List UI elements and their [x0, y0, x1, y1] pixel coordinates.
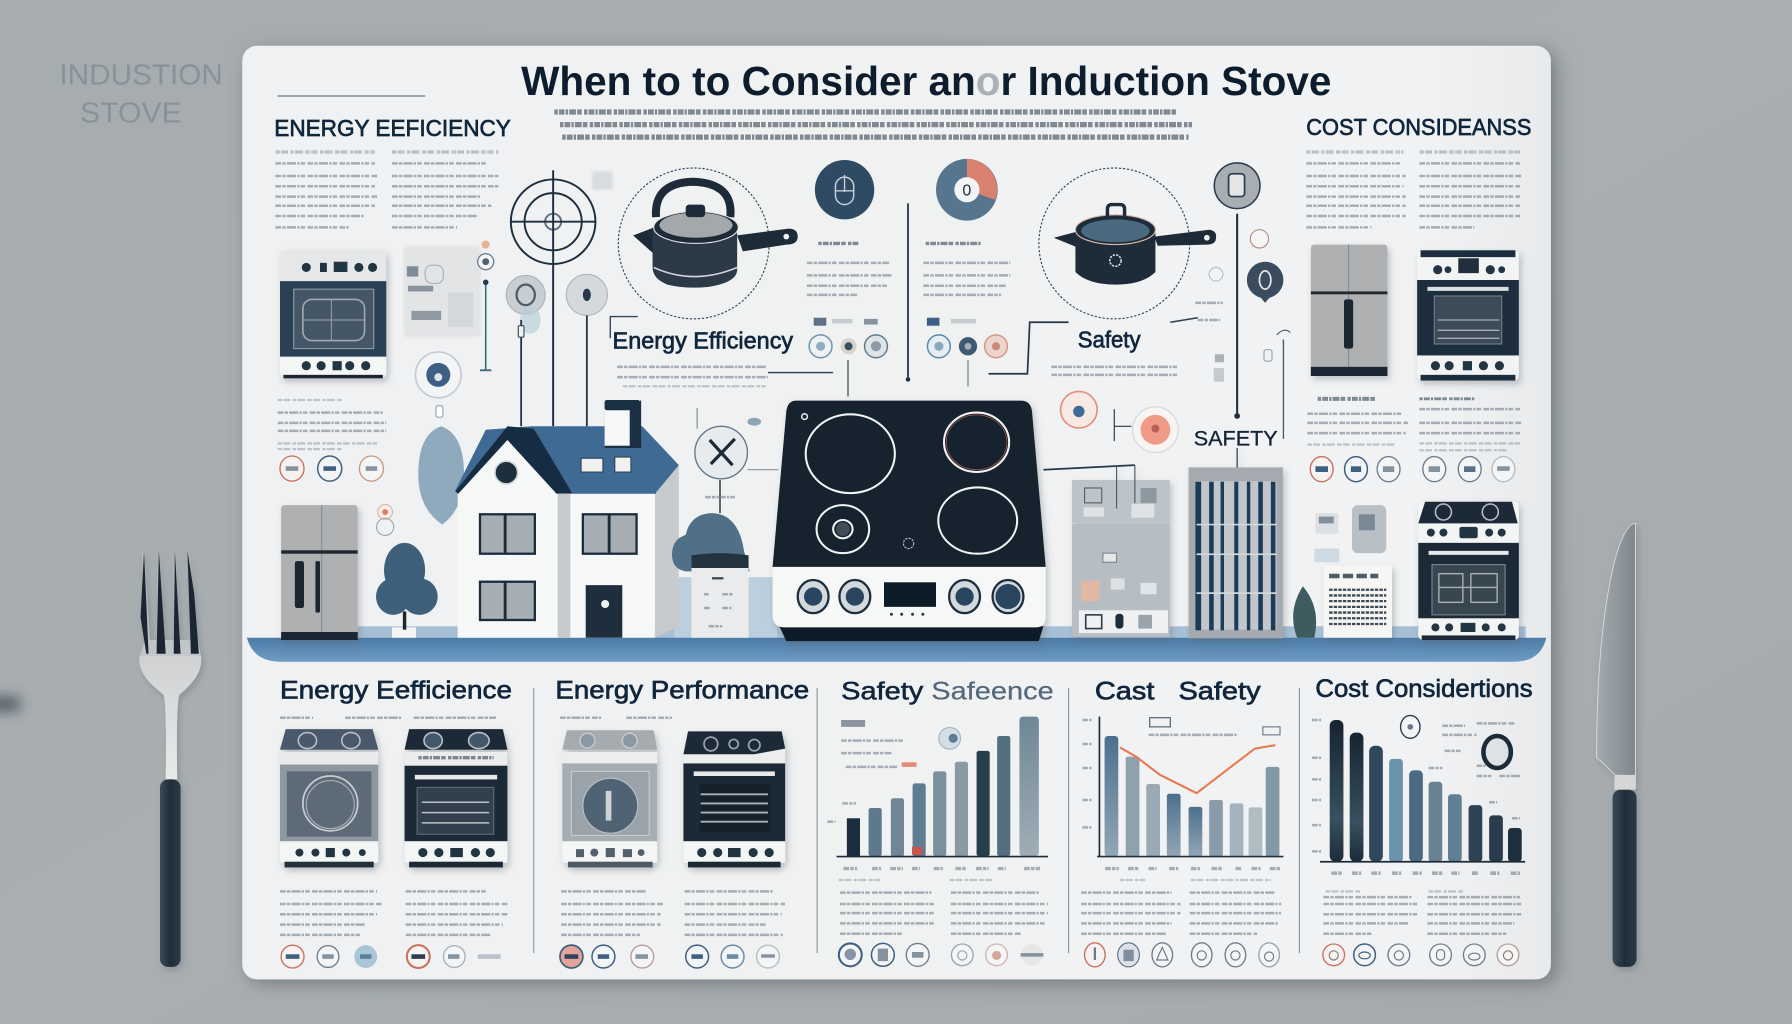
heading: cost considerations: Cost Considertions — [1315, 675, 1533, 703]
icon: document card — [1323, 566, 1392, 638]
text block: cost columns — [1306, 152, 1522, 227]
title: When to to Consider anor Induction Stove — [521, 58, 1331, 104]
icon: tall tree — [418, 426, 464, 525]
icon: gray dial left — [506, 275, 545, 426]
text block: notes — [561, 891, 785, 935]
heading: energy efficience: Energy Eefficience — [280, 676, 512, 704]
icon: gray dial right — [566, 274, 607, 426]
icon: crossed tools badge — [695, 408, 778, 513]
chart annotations — [827, 720, 961, 822]
axis labels — [1105, 867, 1280, 870]
icon: round bush — [672, 513, 750, 571]
icon: donut gauge — [936, 159, 998, 221]
icon: oven left upper — [280, 250, 386, 378]
icon: oven dark with racks — [683, 731, 785, 867]
text block: notes — [1081, 880, 1281, 934]
icon: small tree — [376, 543, 438, 638]
label: safety caps: SAFETY — [1194, 426, 1278, 451]
text block: dial notes left — [807, 243, 891, 295]
icon: small info circle — [1250, 230, 1269, 248]
icon: kettle — [618, 168, 798, 319]
icon: house — [455, 400, 679, 638]
icon: dark round badge — [815, 160, 874, 219]
chart annotations — [1312, 715, 1520, 851]
heading: cast safety: Cast Safety — [1095, 677, 1261, 705]
panel: safety chart — [827, 677, 1054, 966]
icon: bin — [691, 553, 749, 638]
icon row — [1085, 943, 1279, 967]
connector: center vertical — [906, 203, 910, 382]
icon: fridge upper right — [1311, 245, 1387, 376]
bar chart: falling cost — [1320, 720, 1525, 862]
bar chart: cost with trend line — [1097, 717, 1283, 857]
text block: left middle — [278, 400, 386, 449]
text block: intro — [554, 112, 1192, 137]
text block: notes — [1323, 891, 1522, 934]
icon: oven pale — [562, 730, 657, 867]
icon: leaf — [1293, 586, 1316, 638]
icon row — [1323, 944, 1519, 966]
text block: energy efficiency note — [617, 367, 833, 386]
icon: saucepan — [1039, 168, 1216, 319]
icon: grille unit — [1189, 448, 1283, 638]
icon: blue eye badge — [415, 352, 461, 417]
panel: energy efficience — [280, 676, 512, 968]
icon: small tag and pin — [478, 241, 494, 370]
text block: safety note — [1051, 367, 1179, 375]
panel: cost considerations chart — [1312, 675, 1533, 966]
icon row: left trio — [280, 456, 383, 481]
icon: oven dark — [405, 729, 507, 867]
icon row: center left trio — [809, 318, 887, 397]
icon: target gauge — [511, 170, 595, 426]
icon: small gray tags — [1314, 505, 1386, 562]
bar chart: rising safety — [837, 717, 1048, 857]
panel: main infographic board — [242, 46, 1551, 979]
heading: energy efficiency: ENERGY EEFICIENCY — [274, 115, 511, 141]
icon: knife — [1597, 523, 1637, 967]
icon: small badges near fridge — [377, 505, 394, 535]
text block: cost lower right — [1419, 399, 1522, 450]
icon: dark pin — [1247, 262, 1283, 303]
label: energy efficiency: Energy Efficiency — [613, 328, 794, 354]
corner label: induction stove: STOVE — [80, 97, 182, 129]
accent rule — [278, 95, 425, 97]
card: faded spec card — [403, 246, 481, 337]
icon: induction cooktop — [773, 401, 1046, 641]
icon: oven upper right — [1417, 250, 1519, 381]
text block: caption row — [280, 717, 496, 719]
text block: cost lower left — [1307, 399, 1408, 445]
decorative smudge — [592, 171, 613, 190]
corner label: induction stove — [59, 60, 223, 129]
corner label: induction stove: INDUSTION — [59, 60, 223, 92]
dark smudge at left edge — [0, 698, 21, 710]
heading: safety safeence: Safety Safeence — [841, 677, 1054, 705]
heading: cost considerations: COST CONSIDEANSS — [1306, 114, 1531, 140]
text block: energy efficiency columns — [275, 152, 498, 227]
icon: fork — [139, 551, 201, 967]
icon: cabinet display — [1072, 465, 1170, 637]
label: energy efficiency — [610, 317, 794, 354]
dividers between bottom panels — [534, 688, 1299, 953]
icon: donut gauge: 0 — [962, 182, 971, 199]
chart annotations — [1082, 718, 1280, 827]
icon row — [560, 945, 779, 968]
text block: dial notes right — [923, 243, 1010, 295]
icon row — [839, 943, 1043, 966]
panel: cost and safety chart — [1081, 677, 1283, 967]
heading: energy performance: Energy Performance — [555, 676, 809, 704]
icon: oven gray — [280, 729, 378, 867]
icon: oven lower right — [1418, 502, 1519, 640]
axis labels — [843, 867, 1040, 870]
label: safety: Safety — [1078, 326, 1141, 352]
icon row — [281, 945, 501, 968]
floor: blue ledge with light backdrop — [247, 577, 1546, 662]
icon row: center right trio — [927, 318, 1007, 386]
icon row: right sextet — [1310, 457, 1515, 482]
text block: notes — [280, 891, 507, 935]
icon: red badge large — [1114, 407, 1178, 453]
connector: cooktop to shelf — [1043, 465, 1135, 470]
icon: gray pot badge — [1214, 163, 1260, 419]
text block: notes — [839, 880, 1048, 934]
icon: fridge left — [281, 505, 358, 640]
connector: safety elbow — [989, 322, 1069, 374]
connector: right vertical — [1277, 330, 1290, 439]
small labels right of saucepan — [1170, 267, 1272, 382]
icon: red badge small — [1061, 391, 1097, 428]
text block: caption row — [560, 717, 672, 719]
axis labels — [1331, 872, 1520, 875]
panel: energy performance — [555, 676, 809, 968]
